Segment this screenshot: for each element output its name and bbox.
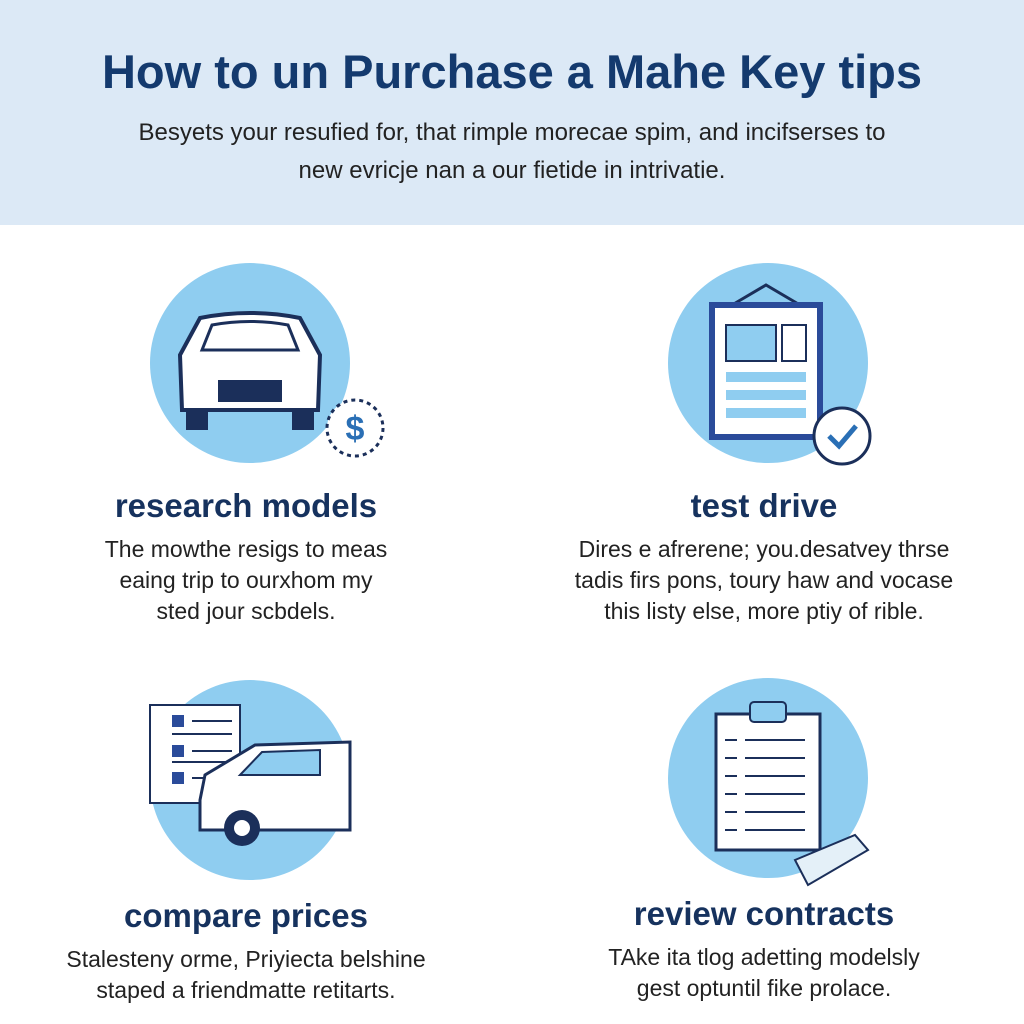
panel: test drive text: this listy else, more ptiy of rible. xyxy=(604,598,924,624)
icon: clipboard and pen xyxy=(668,678,868,885)
panel: review contracts heading: review contracts xyxy=(634,895,894,932)
panel: compare prices text xyxy=(66,946,426,1003)
panel: review contracts text: gest optuntil fike prolace. xyxy=(637,975,891,1001)
panel: research models text: sted jour scbdels. xyxy=(156,598,335,624)
panel: research models text: The mowthe resigs to meas xyxy=(105,536,387,562)
icon: checklist and van xyxy=(150,680,350,880)
panel: test drive text xyxy=(575,536,953,624)
panel: compare prices text: Stalesteny orme, Priyiecta belshine xyxy=(66,946,426,972)
panel: review contracts text: TAke ita tlog adetting modelsly xyxy=(608,944,920,970)
panel: test drive text: tadis firs pons, toury haw and vocase xyxy=(575,567,953,593)
subtitle: new evricje nan a our fietide in intrivatie. xyxy=(299,157,725,184)
panel: research models text: eaing trip to ourxhom my xyxy=(119,567,373,593)
title: How to un Purchase a Mahe Key tips xyxy=(102,45,922,98)
panel: research models heading: research models xyxy=(115,487,377,524)
subtitle xyxy=(138,119,886,184)
panel: compare prices text: staped a friendmatte retitarts. xyxy=(96,977,396,1003)
panel: test drive text: Dires e afrerene; you.desatvey thrse xyxy=(579,536,949,562)
subtitle: Besyets your resufied for, that rimple morecae spim, and incifserses to xyxy=(138,119,886,146)
panel: test drive heading: test drive xyxy=(691,487,837,524)
icon: car with dollar xyxy=(150,263,383,463)
icon: tablet with check xyxy=(668,263,870,464)
header band xyxy=(0,0,1024,225)
panel: review contracts text xyxy=(608,944,920,1001)
panel: research models text xyxy=(105,536,387,624)
icon: car with dollar: $ xyxy=(346,410,365,448)
panel: compare prices heading: compare prices xyxy=(124,897,368,934)
